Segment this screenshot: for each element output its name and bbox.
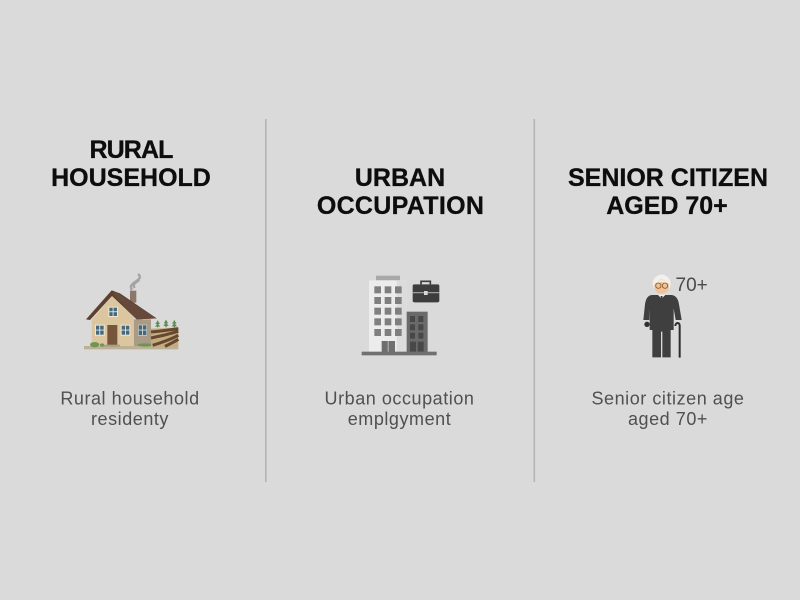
icon: office buildings and briefcase [362,276,439,355]
heading: urban occupation: OCCUPATION [317,192,484,220]
description: rural household: residenty [91,409,169,429]
heading: rural household: HOUSEHOLD [51,164,211,192]
heading: senior citizen aged 70+: SENIOR CITIZEN [568,164,768,192]
icon: senior citizen with cane [643,275,682,358]
description: senior citizen: Senior citizen age [592,388,744,408]
description: senior citizen: aged 70+ [628,409,708,429]
heading: senior citizen aged 70+: AGED 70+ [606,192,728,220]
heading: rural household: RURAL [90,136,173,164]
heading: urban occupation: URBAN [355,164,445,192]
description: urban occupation: Urban occupation [325,388,474,408]
panel: urban occupation [317,164,484,429]
description: urban occupation: emplgyment [348,409,451,429]
description: rural household: Rural household [60,388,200,408]
label: 70+: 70+ [676,275,708,296]
panel: senior citizen aged 70+ [568,164,768,429]
icon: house with farm field [84,274,178,349]
panel: rural household [51,136,211,429]
